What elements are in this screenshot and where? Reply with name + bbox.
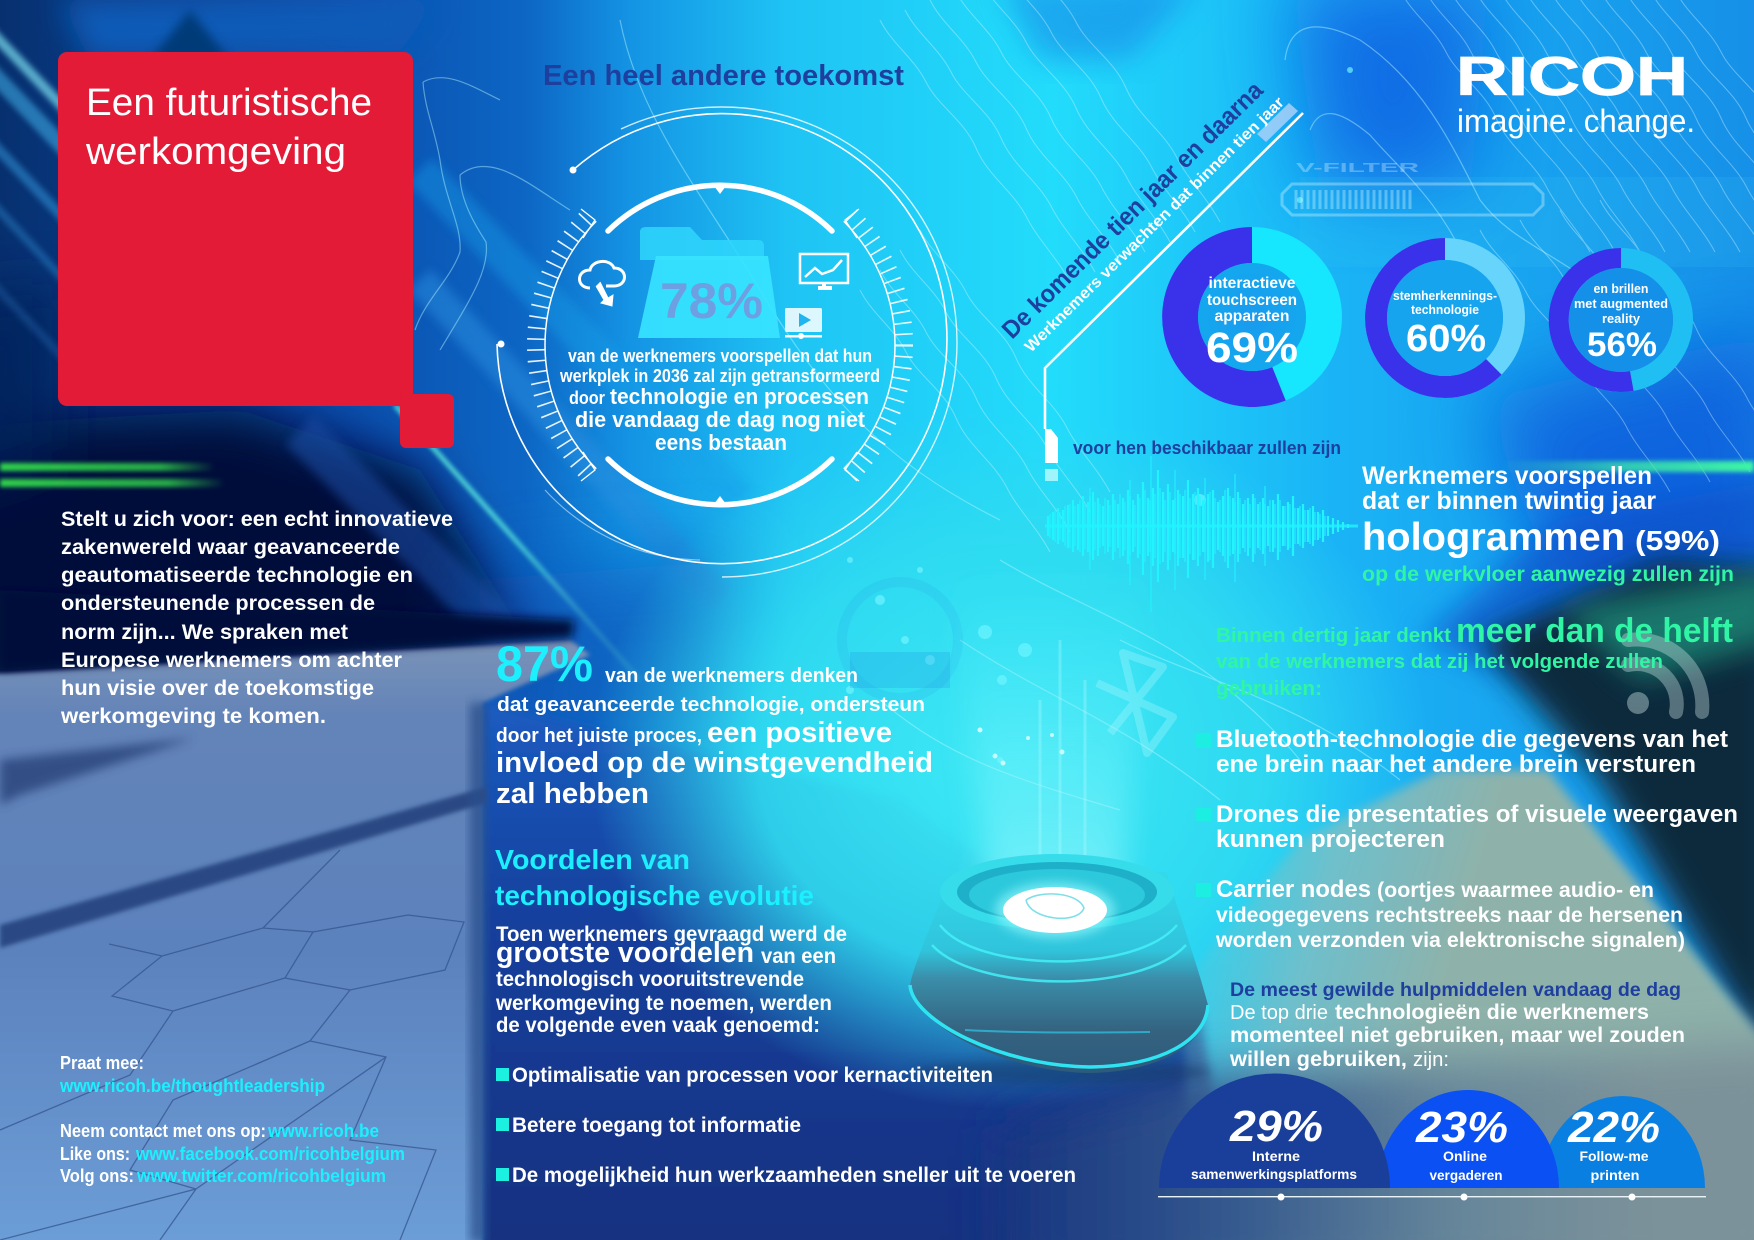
intro text: ondersteunende processen de: [61, 592, 375, 615]
gauge caption: werkplek in 2036 zal zijn getransformeerd: [559, 366, 880, 386]
stat 87% block: van de werknemers denken: [605, 665, 858, 687]
gauge caption: door: [569, 388, 605, 408]
contact details: www.ricoh.be/thoughtleadership: [59, 1076, 325, 1096]
dome: 23% online vergaderen: vergaderen: [1430, 1168, 1502, 1183]
contact details: Volg ons:: [60, 1166, 134, 1186]
contact details: www.twitter.com/ricohbelgium: [136, 1166, 386, 1186]
stat 87% block: dat geavanceerde technologie, ondersteun: [497, 694, 925, 716]
V-filter decoration: V-FILTER: [1296, 160, 1420, 175]
title: werkomgeving: [85, 131, 346, 173]
intro to thirty-year forecast: van de werknemers dat zij het volgende zullen: [1216, 651, 1663, 673]
gauge caption: eens bestaan: [655, 430, 787, 455]
intro text: norm zijn... We spraken met: [61, 621, 348, 644]
heading: voordelen: [495, 844, 814, 911]
voordelen bullet list: Betere toegang tot informatie: [512, 1114, 801, 1137]
stat 87% block: zal hebben: [496, 778, 649, 810]
hologram forecast: Werknemers voorspellen: [1362, 462, 1652, 490]
contact details: www.ricoh.be: [267, 1121, 379, 1141]
intro text: Europese werknemers om achter: [61, 649, 402, 672]
green light bars left: [0, 463, 225, 487]
forecast bullet list: (oortjes waarmee audio- en: [1377, 879, 1654, 902]
donut chart: 60%: technologie: [1411, 303, 1479, 317]
heading: voordelen: technologische evolutie: [495, 880, 814, 911]
V-filter decoration: [1282, 160, 1543, 215]
radial gauge with 78% stat: [497, 107, 957, 577]
icon: wifi: [1627, 639, 1702, 714]
voordelen paragraph: van een: [761, 945, 836, 968]
RICOH logo: imagine. change.: [1457, 103, 1695, 139]
hologram device: [910, 560, 1210, 1084]
voordelen bullet list: Optimalisatie van processen voor kernactiviteiten: [512, 1064, 993, 1087]
gauge caption: van de werknemers voorspellen dat hun: [568, 346, 872, 366]
intro text: hun visie over de toekomstige: [61, 677, 374, 700]
dome: 22% follow-me printen: 22%: [1567, 1103, 1660, 1152]
voordelen paragraph: werkomgeving te noemen, werden: [495, 992, 832, 1015]
donut chart: 56%: en brillen: [1594, 282, 1648, 296]
green light bar right: [1500, 461, 1754, 472]
gauge caption: [559, 346, 880, 455]
dome: 23% online vergaderen: Online: [1443, 1149, 1488, 1164]
red title box: [58, 52, 454, 448]
donut chart: 69%: touchscreen: [1207, 292, 1297, 309]
title: [85, 82, 372, 173]
voordelen paragraph: Toen werknemers gevraagd werd de: [496, 923, 847, 946]
dome: 23% online vergaderen: [1377, 1090, 1559, 1188]
RICOH logo: [1456, 45, 1695, 139]
forecast bullet list: worden verzonden via elektronische signalen): [1215, 929, 1685, 952]
dome: 29% interne samenwerkingsplatforms: samenwerkingsplatforms: [1191, 1167, 1357, 1182]
donut chart: 60%: [1376, 249, 1514, 387]
dome chart: [1158, 1074, 1706, 1200]
hologram forecast: dat er binnen twintig jaar: [1362, 487, 1656, 515]
donut chart: 60%: stemherkennings-: [1393, 289, 1497, 303]
donut chart: 69%: 69%: [1206, 324, 1298, 372]
popular tools paragraph: De top drie: [1230, 1002, 1328, 1024]
heading: een heel andere toekomst: Een heel andere toekomst: [543, 60, 904, 92]
contact details: [59, 1053, 405, 1186]
dome baseline with markers: [1158, 1194, 1706, 1200]
angled heading: Werknemers verwachten dat binnen tien jaar: [1022, 94, 1288, 356]
donut chart: 60%: 60%: [1406, 318, 1486, 360]
icon: bluetooth watermark: [1097, 653, 1173, 753]
stat 87% block: 87%: [496, 636, 593, 692]
popular tools paragraph: De meest gewilde hulpmiddelen vandaag de dag: [1230, 979, 1681, 1001]
icon: folder: [638, 227, 780, 338]
dome: 23% online vergaderen: 23%: [1415, 1103, 1508, 1152]
contact details: www.facebook.com/ricohbelgium: [135, 1144, 405, 1164]
intro to thirty-year forecast: gebruiken:: [1216, 678, 1322, 700]
intro text: [60, 508, 453, 728]
donut chart: 56%: reality: [1602, 312, 1640, 326]
popular tools paragraph: [1229, 979, 1685, 1071]
dome: 22% follow-me printen: Follow-me: [1580, 1149, 1649, 1164]
donut chart: 56%: 56%: [1587, 326, 1657, 364]
stat 78%: 78%: [660, 273, 763, 329]
forecast bullet list: Drones die presentaties of visuele weergaven: [1216, 801, 1738, 828]
intro text: zakenwereld waar geavanceerde: [61, 536, 400, 559]
voordelen bullet list: De mogelijkheid hun werkzaamheden sneller uit te voeren: [512, 1164, 1076, 1187]
forecast bullet list: kunnen projecteren: [1216, 826, 1445, 853]
forecast bullet list: videogegevens rechtstreeks naar de hersenen: [1216, 904, 1683, 927]
icon: cloud download: [580, 261, 624, 306]
forecast bullet list: [1196, 726, 1738, 952]
caption below donuts: voor hen beschikbaar zullen zijn: [1073, 438, 1341, 458]
intro text: werkomgeving te komen.: [60, 705, 326, 728]
intro to thirty-year forecast: [1216, 612, 1733, 700]
stat 87% block: door het juiste proces,: [496, 725, 702, 747]
popular tools paragraph: zijn:: [1413, 1049, 1449, 1071]
donut chart: 69%: [1180, 245, 1324, 389]
dome: 29% interne samenwerkingsplatforms: [1159, 1074, 1390, 1188]
angled heading: De komende tien jaar en daarna: [997, 75, 1269, 344]
donut chart: 56%: [1559, 258, 1683, 382]
donut chart: 69%: interactieve: [1208, 275, 1296, 292]
title: Een futuristische: [86, 82, 372, 124]
hologram forecast: (59%): [1635, 525, 1720, 556]
hologram forecast: op de werkvloer aanwezig zullen zijn: [1362, 563, 1734, 586]
dome: 22% follow-me printen: printen: [1590, 1168, 1640, 1183]
stat 87% block: invloed op de winstgevendheid: [496, 747, 933, 779]
popular tools paragraph: technologieën die werknemers: [1335, 1001, 1649, 1024]
donut chart: 69%: apparaten: [1214, 308, 1290, 325]
voordelen paragraph: de volgende even vaak genoemd:: [496, 1014, 820, 1037]
intro to thirty-year forecast: meer dan de helft: [1456, 612, 1733, 650]
gauge caption: die vandaag de dag nog niet: [575, 407, 866, 432]
contact details: Neem contact met ons op:: [60, 1121, 266, 1141]
hologram forecast: hologrammen: [1362, 516, 1625, 559]
contact details: Like ons:: [60, 1144, 130, 1164]
dome: 29% interne samenwerkingsplatforms: Interne: [1252, 1149, 1301, 1164]
RICOH logo: RICOH: [1456, 45, 1688, 107]
gauge caption: technologie en processen: [610, 384, 869, 409]
voordelen paragraph: grootste voordelen: [496, 937, 754, 969]
forecast bullet list: Carrier nodes: [1216, 876, 1371, 903]
contact details: Praat mee:: [60, 1053, 144, 1073]
sound waveform: [1045, 456, 1358, 612]
dome: 29% interne samenwerkingsplatforms: 29%: [1229, 1102, 1323, 1151]
intro text: geautomatiseerde technologie en: [61, 564, 413, 587]
intro text: Stelt u zich voor: een echt innovatieve: [61, 508, 453, 531]
forecast bullet list: ene brein naar het andere brein versturen: [1216, 751, 1696, 778]
voordelen paragraph: [495, 923, 847, 1037]
intro to thirty-year forecast: Binnen dertig jaar denkt: [1216, 625, 1451, 647]
popular tools paragraph: momenteel niet gebruiken, maar wel zouden: [1230, 1024, 1685, 1047]
stat 87% block: [496, 636, 933, 810]
icon: video player: [785, 308, 822, 339]
hologram forecast: [1362, 462, 1734, 586]
voordelen bullet list: [496, 1064, 1076, 1187]
donut chart: 56%: met augmented: [1574, 297, 1668, 311]
popular tools paragraph: willen gebruiken,: [1229, 1048, 1407, 1071]
angled connector line: [1045, 103, 1303, 481]
voordelen paragraph: technologisch vooruitstrevende: [496, 968, 804, 991]
dome: 22% follow-me printen: [1540, 1096, 1705, 1188]
heading: voordelen: Voordelen van: [495, 844, 690, 875]
forecast bullet list: Bluetooth-technologie die gegevens van het: [1216, 726, 1728, 753]
icon: monitor chart: [800, 254, 848, 288]
stat 87% block: een positieve: [707, 717, 892, 749]
